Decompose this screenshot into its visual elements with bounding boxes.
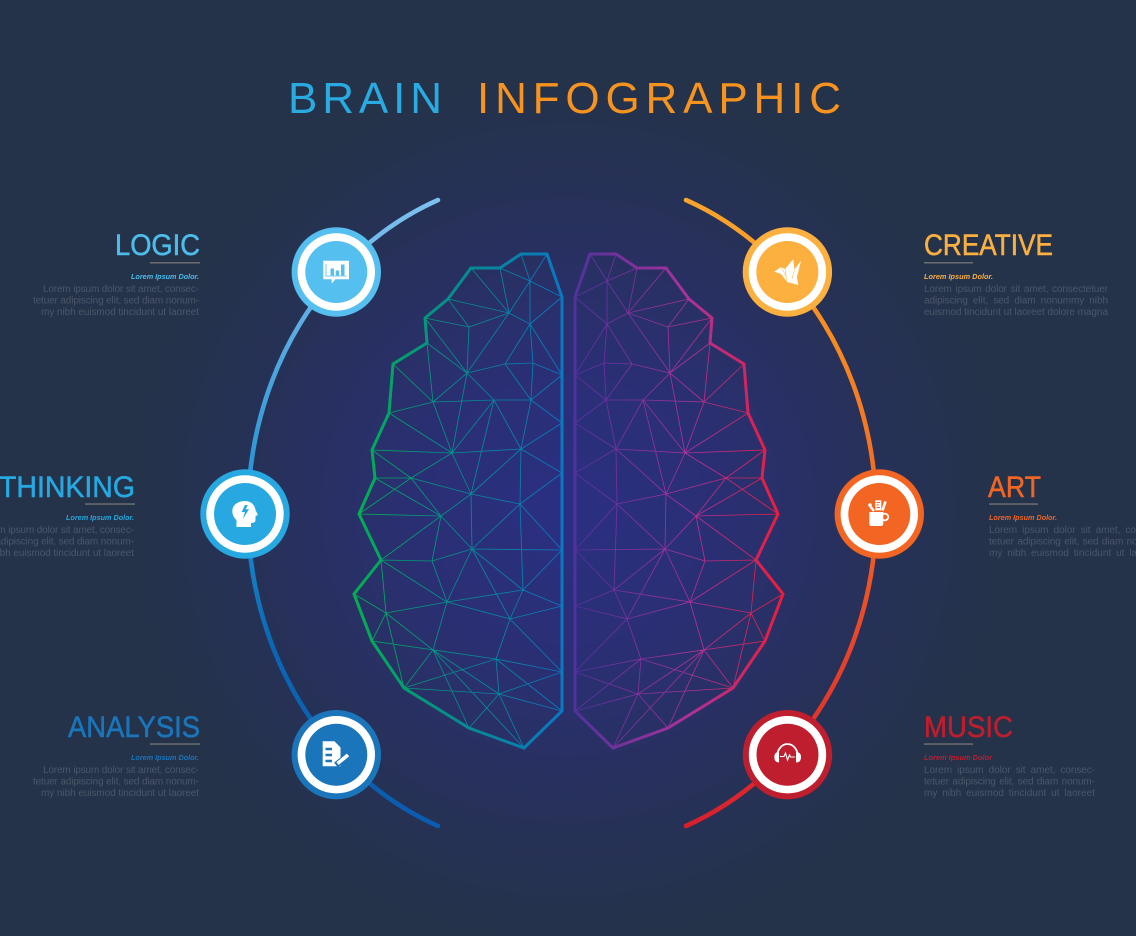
right hemisphere outline: [575, 254, 783, 748]
label: creative: Lorem ipsum dolor sit amet, consectetuer: [924, 284, 1109, 295]
label: art: [988, 471, 1136, 559]
label: analysis: my nibh euismod tincidunt ut laoreet: [41, 788, 199, 799]
right arc: [686, 200, 876, 826]
icon: document with pencil: [323, 741, 349, 766]
right hemisphere mesh: [575, 254, 783, 748]
icon: mug with pens: [868, 500, 888, 526]
left arc: [248, 200, 438, 826]
node: creative: [743, 227, 832, 317]
node: music: [743, 710, 832, 799]
left hemisphere mesh: [354, 254, 562, 748]
label: logic: LOGIC: [115, 229, 200, 262]
label: analysis: tetuer adipiscing elit, sed diam nonum-: [33, 777, 199, 788]
node: analysis: [292, 710, 381, 799]
icon: origami bird: [774, 259, 801, 285]
label: art: Lorem Ipsum Dolor.: [989, 513, 1057, 522]
label: logic: Lorem ipsum dolor sit amet, consec-: [43, 284, 199, 295]
label: analysis: [33, 711, 200, 799]
left hemisphere outline: [354, 254, 562, 748]
label: thinking: [0, 471, 135, 559]
label: music: Lorem ipsum dolor sit amet, consec-: [924, 765, 1095, 776]
title: [288, 74, 841, 123]
right brain hemisphere: [575, 254, 783, 748]
label: logic: Lorem Ipsum Dolor.: [131, 272, 199, 281]
label: analysis: Lorem Ipsum Dolor.: [131, 753, 199, 762]
label: creative: euismod tincidunt ut laoreet dolore magna: [924, 307, 1108, 318]
label: creative: CREATIVE: [924, 229, 1053, 262]
label: music: tetuer adipiscing elit, sed diam nonum-: [924, 777, 1095, 788]
label: art: ART: [988, 471, 1041, 504]
icon: headphones: [774, 744, 801, 762]
label: creative: Lorem Ipsum Dolor.: [924, 272, 993, 281]
node: logic: [292, 227, 381, 317]
label: music: [924, 711, 1095, 799]
label: music: Lorem Ipsum Dolor: [924, 753, 993, 762]
left brain hemisphere: [354, 254, 562, 748]
label: thinking: THINKING: [0, 471, 135, 504]
title: BRAIN: [288, 74, 442, 123]
label: analysis: Lorem ipsum dolor sit amet, consec-: [43, 765, 199, 776]
label: music: MUSIC: [924, 711, 1013, 744]
label: logic: tetuer adipiscing elit, sed diam nonum-: [33, 296, 199, 307]
label: creative: adipiscing elit, sed diam nonummy nibh: [924, 296, 1108, 307]
label: logic: [33, 229, 200, 318]
icon: head with lightning bolt: [232, 501, 258, 527]
label: logic: my nibh euismod tincidunt ut laoreet: [41, 307, 199, 318]
node: thinking: [200, 469, 290, 559]
icon: chart speech bubble: [323, 261, 349, 284]
title: INFOGRAPHIC: [477, 74, 841, 123]
node: art: [835, 469, 924, 559]
label: analysis: ANALYSIS: [68, 711, 200, 744]
label: music: my nibh euismod tincidunt ut laoreet: [924, 788, 1095, 799]
label: creative: [924, 229, 1109, 318]
label: thinking: Lorem Ipsum Dolor.: [66, 513, 134, 522]
